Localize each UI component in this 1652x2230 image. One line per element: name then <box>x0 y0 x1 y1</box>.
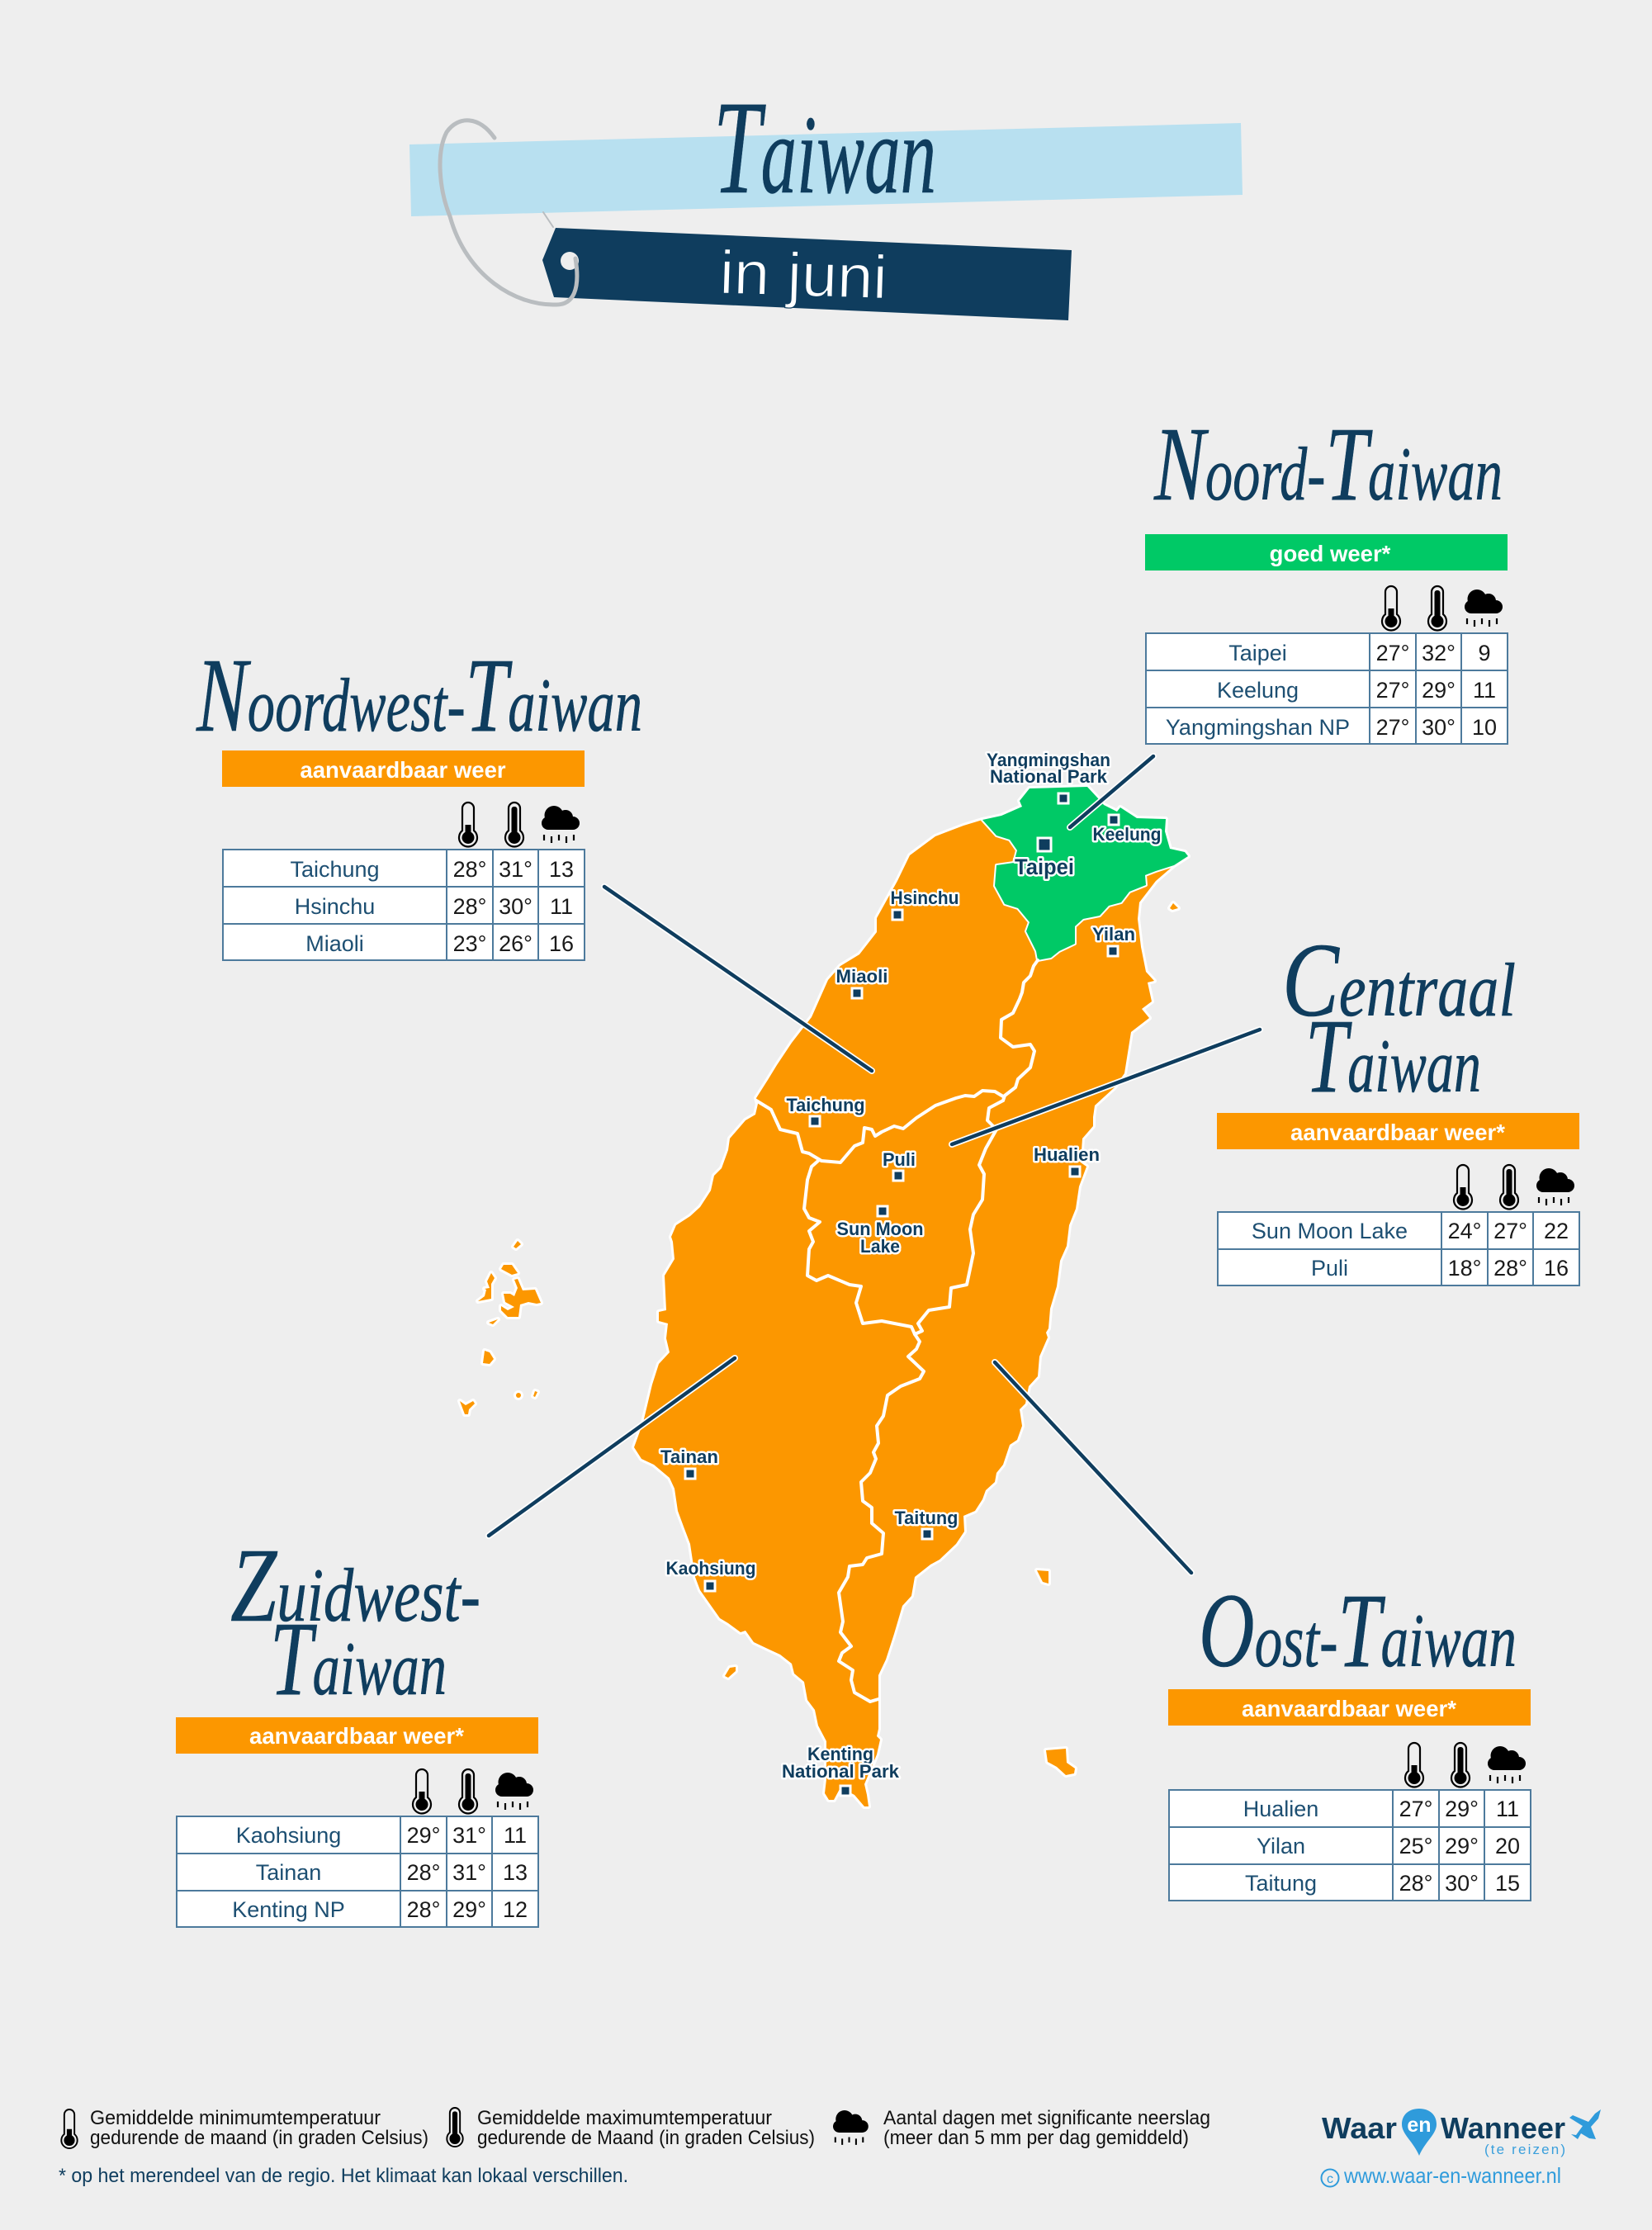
table values: Taitung <box>1245 1871 1317 1896</box>
city: Puli <box>883 1149 916 1181</box>
map of Taiwan <box>460 750 1260 1806</box>
panel: Zuidwest-Taiwan <box>176 1527 538 1927</box>
table values: 13 <box>503 1860 528 1885</box>
table values: 29° <box>1445 1797 1479 1821</box>
footnote: * op het merendeel van de regio. Het klimaat kan lokaal verschillen. <box>59 2165 628 2187</box>
table values: 23° <box>453 931 486 956</box>
table values: 27° <box>1376 678 1409 703</box>
legend <box>59 2107 1210 2187</box>
table values: Yilan <box>1257 1834 1305 1858</box>
table values: Puli <box>1311 1256 1348 1281</box>
table values: 16 <box>549 931 574 956</box>
table values: 11 <box>1496 1797 1519 1821</box>
row lines <box>1146 633 1508 744</box>
table values: 31° <box>452 1860 486 1885</box>
heading <box>1282 921 1516 1115</box>
heading: Taiwan <box>1305 997 1481 1115</box>
table values <box>1243 1797 1520 1896</box>
title block <box>409 74 1243 320</box>
table values: 27° <box>1376 641 1409 665</box>
table values: 31° <box>452 1823 486 1848</box>
heading: Oost-Taiwan <box>1199 1572 1517 1689</box>
weather table <box>1146 586 1508 744</box>
logo wordmark: Wanneer <box>1441 2111 1565 2145</box>
tag string <box>440 121 577 305</box>
city: Kaohsiung <box>665 1558 756 1591</box>
city: Puli: Puli <box>883 1149 916 1170</box>
table values <box>1252 1219 1569 1281</box>
table values: 30° <box>499 894 533 919</box>
city: Yangmingshan National Park <box>987 750 1110 803</box>
leader line: Noord-Taiwan <box>1070 756 1153 827</box>
column icons <box>1454 1165 1574 1209</box>
city: Yilan <box>1092 924 1135 956</box>
city: Hualien <box>1034 1144 1100 1177</box>
leader line: Noordwest-Taiwan <box>604 887 872 1071</box>
table values: Kaohsiung <box>236 1823 341 1848</box>
table values: Hualien <box>1243 1797 1318 1821</box>
city: Taichung: Taichung <box>786 1095 865 1115</box>
table values: 16 <box>1544 1256 1569 1281</box>
rating band: goed weer <box>1145 534 1508 571</box>
table values: 28° <box>407 1860 440 1885</box>
table values: 29° <box>1445 1834 1479 1858</box>
subtitle: in juni: in juni <box>718 238 888 311</box>
legend: precipitation: (meer dan 5 mm per dag gemiddeld) <box>883 2127 1189 2149</box>
table values: 29° <box>407 1823 440 1848</box>
city: Hsinchu <box>890 888 959 920</box>
city: Hualien: Hualien <box>1034 1144 1100 1165</box>
table values: 27° <box>1399 1797 1432 1821</box>
panel: Oost-Taiwan <box>1168 1572 1531 1901</box>
table values: 15 <box>1495 1871 1520 1896</box>
table values: Kenting NP <box>232 1897 345 1922</box>
city: Keelung <box>1093 815 1161 845</box>
city: Kenting National Park <box>782 1744 899 1796</box>
legend: maximum temperature: Gemiddelde maximumtemperatuur <box>477 2107 772 2129</box>
subtitle tag: dark navy <box>542 228 1072 320</box>
table values: 11 <box>504 1823 527 1848</box>
logo pin: en <box>1407 2114 1432 2137</box>
heading: Noord-Taiwan <box>1153 405 1503 523</box>
city: Kenting National Park: Kenting <box>807 1744 873 1764</box>
city: Taitung <box>895 1508 958 1539</box>
legend: minimum temperature: Gemiddelde minimumtemperatuur <box>90 2107 381 2129</box>
heading <box>230 1527 480 1717</box>
row lines <box>177 1816 538 1927</box>
heading: Zuidwest- <box>230 1527 480 1644</box>
column icons <box>1405 1743 1526 1787</box>
heading: Noordwest-Taiwan <box>196 637 642 754</box>
city: Yangmingshan National Park: National Park <box>990 766 1107 787</box>
icon: plane <box>1569 2109 1601 2139</box>
legend: precipitation <box>833 2107 1210 2149</box>
islands: east and south <box>725 903 1178 1775</box>
islands: Penghu <box>460 1241 541 1414</box>
table values: 27° <box>1493 1219 1527 1243</box>
table values: 28° <box>453 894 486 919</box>
title: Taiwan: Taiwan <box>713 74 936 222</box>
region: Noord-Taiwan (green) <box>982 787 1188 960</box>
legend: minimum temperature <box>61 2107 428 2149</box>
city: Miaoli: Miaoli <box>835 966 888 987</box>
table values: 13 <box>549 857 574 882</box>
city: Tainan: Tainan <box>660 1446 718 1467</box>
column icons <box>1382 586 1503 630</box>
rating band: aanvaardbaar weer <box>176 1717 538 1754</box>
table values: 9 <box>1478 641 1491 665</box>
column icons <box>413 1769 533 1813</box>
city: Taipei: Taipei <box>1015 855 1074 879</box>
legend: maximum temperature: gedurende de Maand (in graden Celsius) <box>477 2127 815 2149</box>
table values: 27° <box>1376 715 1409 740</box>
rating band: aanvaardbaar weer <box>222 750 585 787</box>
table values: 24° <box>1448 1219 1481 1243</box>
city: Taipei <box>1015 838 1074 879</box>
leader line: Zuidwest-Taiwan <box>489 1358 735 1536</box>
legend: maximum temperature <box>447 2107 815 2149</box>
column icons <box>459 803 580 846</box>
table values: 30° <box>1422 715 1456 740</box>
weather table <box>223 803 585 960</box>
table values: 12 <box>503 1897 528 1922</box>
table values: Miaoli <box>305 931 364 956</box>
table values: 28° <box>1399 1871 1432 1896</box>
rating band: aanvaardbaar weer: aanvaardbaar weer* <box>1290 1120 1505 1145</box>
row lines <box>1169 1790 1531 1901</box>
row lines <box>223 850 585 960</box>
table values: 26° <box>499 931 533 956</box>
city: Taitung: Taitung <box>895 1508 958 1528</box>
table values: Hsinchu <box>295 894 375 919</box>
table values <box>290 857 574 956</box>
city: Sun Moon Lake <box>837 1206 923 1257</box>
city: Taichung <box>786 1095 865 1126</box>
table values: 31° <box>499 857 533 882</box>
logo tagline: (te reizen) <box>1484 2142 1565 2157</box>
heading: Centraal <box>1282 921 1516 1039</box>
table values: 18° <box>1448 1256 1481 1281</box>
website: c <box>1327 2172 1333 2186</box>
panel: Centraal Taiwan <box>1217 921 1579 1285</box>
weather table <box>1169 1743 1531 1901</box>
table values: Taipei <box>1228 641 1287 665</box>
city: Tainan <box>660 1446 718 1479</box>
table values: 32° <box>1422 641 1456 665</box>
city: Keelung: Keelung <box>1093 824 1161 845</box>
weather table <box>177 1769 538 1927</box>
rating band: aanvaardbaar weer: aanvaardbaar weer <box>300 757 506 783</box>
table values: 11 <box>550 894 573 919</box>
weather table <box>1218 1165 1579 1285</box>
table values: 20 <box>1495 1834 1520 1858</box>
city: Kaohsiung: Kaohsiung <box>665 1558 756 1579</box>
table values: 10 <box>1472 715 1497 740</box>
rating band: aanvaardbaar weer: aanvaardbaar weer* <box>249 1723 464 1749</box>
city: Miaoli <box>835 966 888 998</box>
heading: Taiwan <box>270 1600 447 1717</box>
panel: Noord-Taiwan <box>1145 405 1508 744</box>
table values: 29° <box>452 1897 486 1922</box>
table values <box>1166 641 1497 740</box>
tag hole <box>561 252 579 270</box>
legend: minimum temperature: gedurende de maand (in graden Celsius) <box>90 2127 428 2149</box>
city: Hsinchu: Hsinchu <box>890 888 959 908</box>
table values: Yangmingshan NP <box>1166 715 1350 740</box>
rating band: goed weer: goed weer* <box>1270 541 1391 566</box>
table values: Sun Moon Lake <box>1252 1219 1408 1243</box>
table values: 28° <box>1493 1256 1527 1281</box>
table values: 28° <box>453 857 486 882</box>
table values: Keelung <box>1217 678 1299 703</box>
logo pin <box>1402 2109 1437 2156</box>
table values <box>232 1823 528 1922</box>
rating band: aanvaardbaar weer <box>1217 1113 1579 1149</box>
table values: 29° <box>1422 678 1456 703</box>
city: Yangmingshan National Park: Yangmingshan <box>987 750 1110 770</box>
table values: 28° <box>407 1897 440 1922</box>
table values: Taichung <box>290 857 380 882</box>
leader line: Centraal Taiwan <box>952 1030 1260 1144</box>
table values: 25° <box>1399 1834 1432 1858</box>
logo wordmark: Waar <box>1322 2111 1397 2145</box>
table values: 11 <box>1473 678 1496 703</box>
region borders <box>756 960 1038 1702</box>
main island <box>634 787 1188 1806</box>
legend: precipitation: Aantal dagen met significante neerslag <box>883 2107 1210 2129</box>
city: Yilan: Yilan <box>1092 924 1135 945</box>
city: Kenting National Park: National Park <box>782 1761 899 1782</box>
logo: Waar en Wanneer <box>1321 2109 1601 2188</box>
table values: 22 <box>1544 1219 1569 1243</box>
table values: Tainan <box>256 1860 321 1885</box>
leader line: Oost-Taiwan <box>995 1362 1191 1573</box>
rating band: aanvaardbaar weer <box>1168 1689 1531 1726</box>
city: Sun Moon Lake: Sun Moon <box>837 1219 923 1239</box>
rating band: aanvaardbaar weer: aanvaardbaar weer* <box>1242 1696 1456 1721</box>
logo wordmark <box>1322 2111 1565 2145</box>
title band: light blue <box>409 123 1243 216</box>
table values: 30° <box>1445 1871 1479 1896</box>
row lines <box>1218 1212 1579 1285</box>
website: www.waar-en-wanneer.nl <box>1343 2163 1561 2188</box>
city: Sun Moon Lake: Lake <box>860 1236 900 1257</box>
panel: Noordwest-Taiwan <box>196 637 642 960</box>
